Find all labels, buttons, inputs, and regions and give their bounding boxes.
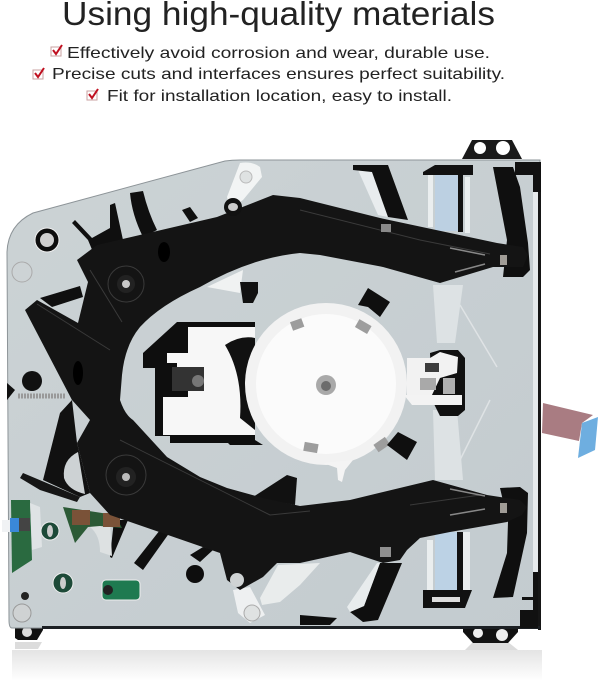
gear teeth	[323, 460, 353, 482]
half disc behind arm	[64, 452, 85, 494]
icon: check 2	[33, 68, 44, 79]
right slots	[110, 165, 530, 625]
black tab above disc	[358, 288, 390, 317]
lower-left finger	[20, 473, 80, 502]
pickup sled	[143, 322, 263, 445]
spindle disc	[245, 303, 407, 482]
left slots	[40, 191, 198, 307]
icon: check 1	[51, 45, 62, 56]
right edge rail	[42, 162, 541, 630]
feature line 1: Effectively avoid corrosion and wear, durable use.	[67, 45, 490, 62]
lower mechanism	[2, 475, 320, 623]
right clamp assembly	[404, 350, 465, 416]
feature line 2: Precise cuts and interfaces ensures perfect suitability.	[52, 66, 505, 83]
translucent rods	[423, 165, 497, 608]
flex cable	[542, 403, 598, 458]
feature list	[33, 45, 505, 105]
black box under arm	[240, 282, 258, 303]
white lever top	[227, 162, 262, 210]
top mounting tab	[462, 140, 522, 159]
optical drive	[2, 140, 541, 643]
green board	[63, 507, 122, 543]
icon: check 3	[87, 89, 98, 100]
screws and pins	[7, 228, 73, 622]
feature line 3: Fit for installation location, easy to install.	[107, 88, 452, 105]
bottom mounting tabs	[15, 627, 518, 643]
reflection	[12, 642, 542, 681]
black tab below disc	[387, 432, 417, 460]
lower-left bar	[43, 400, 90, 497]
black arms	[25, 195, 528, 590]
white piece under arm	[207, 270, 243, 293]
arm ridges and pivots	[37, 198, 507, 587]
metal plate	[7, 160, 540, 628]
